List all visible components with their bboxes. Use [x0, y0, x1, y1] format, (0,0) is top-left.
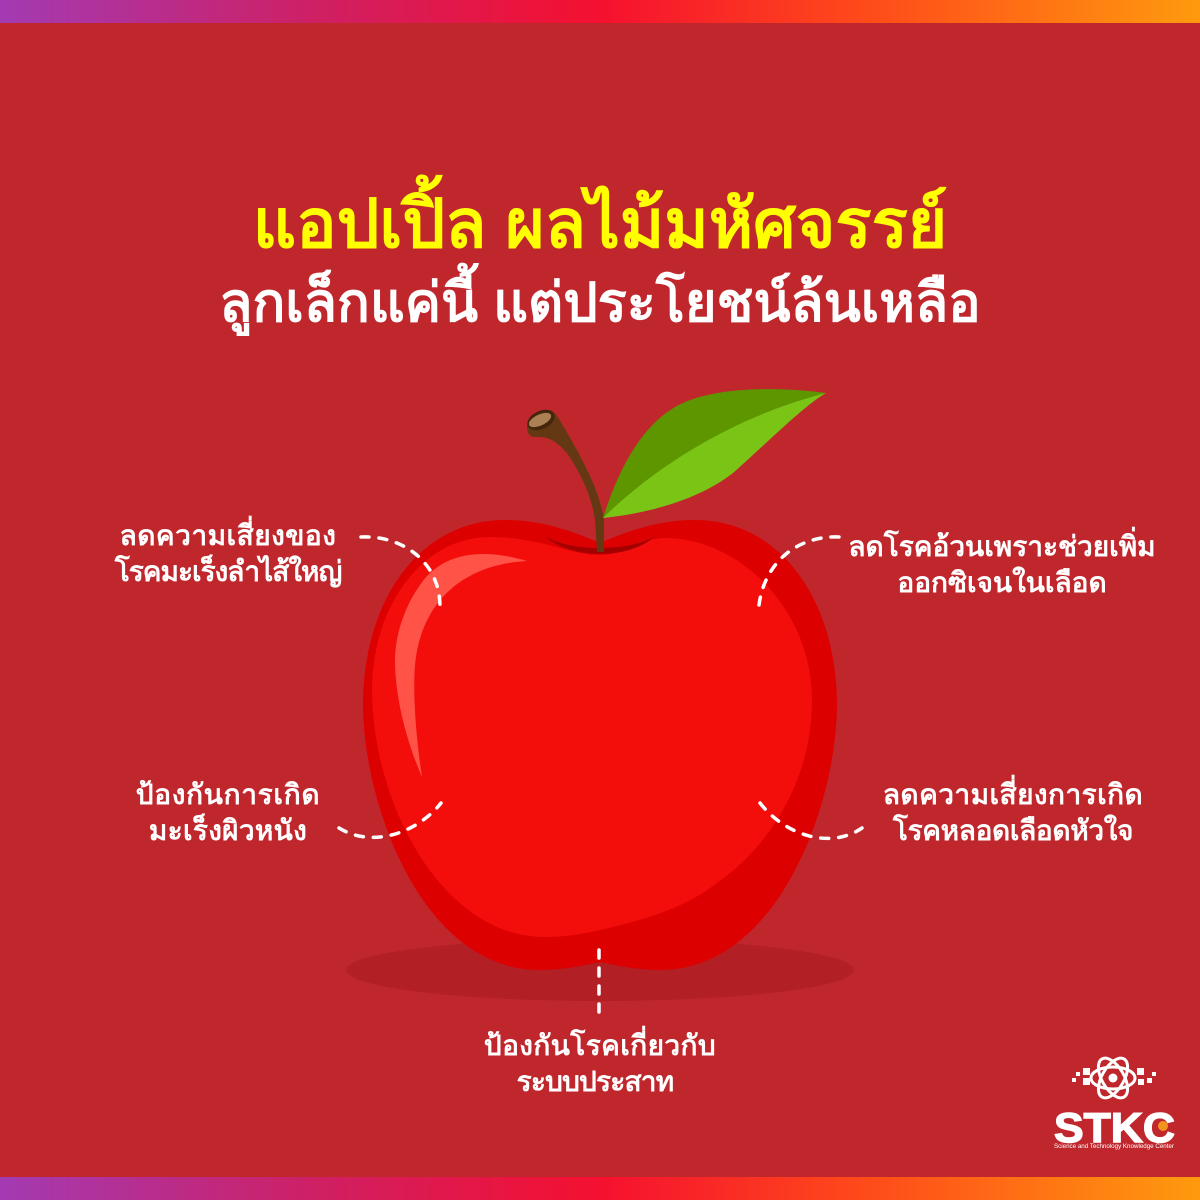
label: nervous system: ป้องกันโรคเกี่ยวกับ: [484, 1030, 716, 1061]
logo wordmark: STKC: [1054, 1104, 1175, 1151]
top gradient bar: [0, 0, 1200, 23]
bottom gradient bar: [0, 1177, 1200, 1200]
ground shadow: [346, 939, 854, 1001]
label: nervous system: [484, 1026, 716, 1097]
stem: [524, 406, 604, 552]
subtitle: ลูกเล็กแค่นี้ แต่ประโยชน์ล้นเหลือ: [219, 273, 981, 333]
callout lines: [339, 537, 862, 1015]
title: แอปเปิ้ล ผลไม้มหัศจรรย์: [253, 187, 947, 262]
leaf: [603, 389, 826, 518]
stem crease: [545, 536, 655, 554]
label: colon cancer: โรคมะเร็งลำไส้ใหญ่: [115, 556, 341, 587]
label: colon cancer: [114, 516, 342, 588]
label: obesity: ออกซิเจนในเลือด: [897, 567, 1107, 598]
apple body light: [372, 537, 812, 937]
label: heart disease: [883, 774, 1143, 846]
label: skin cancer: ป้องกันการเกิด: [136, 779, 320, 810]
label: heart disease: โรคหลอดเลือดหัวใจ: [893, 815, 1133, 846]
label: nervous system: ระบบประสาท: [517, 1066, 673, 1097]
apple body dark: [363, 520, 837, 970]
label: heart disease: ลดความเสี่ยงการเกิด: [883, 779, 1143, 810]
label: obesity: [848, 526, 1156, 598]
logo orange dot: [1158, 1121, 1168, 1131]
logo pixel squares: [1072, 1068, 1156, 1085]
label: colon cancer: ลดความเสี่ยงของ: [120, 520, 336, 551]
label: obesity: ลดโรคอ้วนเพราะช่วยเพิ่ม: [848, 531, 1156, 562]
logo atom icon: [1091, 1053, 1135, 1103]
label: skin cancer: มะเร็งผิวหนัง: [149, 815, 307, 846]
logo tagline: Science and Technology Knowledge Center: [1054, 1144, 1174, 1150]
apple highlight: [395, 554, 527, 777]
label: skin cancer: [136, 779, 320, 846]
STKC logo: [1054, 1053, 1175, 1151]
